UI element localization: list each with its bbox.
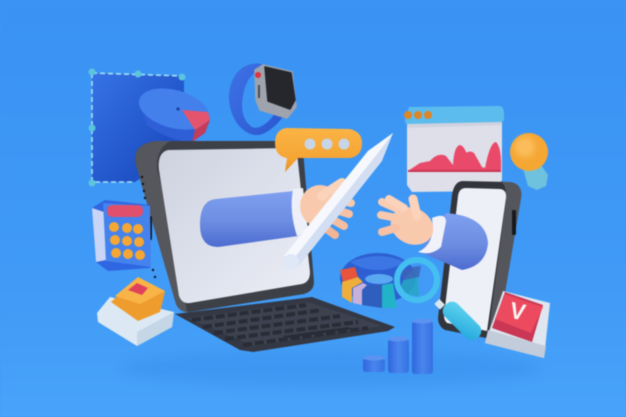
tablet screen: [159, 148, 310, 303]
callout: orange chat bubble: [275, 128, 362, 172]
arm: right sleeve: [418, 213, 488, 270]
check label: V: [507, 297, 529, 326]
button: red check key: [485, 291, 550, 358]
chart: 3D bars: [363, 318, 433, 374]
icon: smartwatch: [229, 63, 296, 135]
button: orange heart key: [97, 277, 174, 346]
device: phone: [438, 181, 521, 338]
hand: left: [300, 183, 351, 235]
device: keyboard: [175, 297, 395, 352]
icon: lightbulb: [510, 133, 548, 190]
icon: calculator: [92, 200, 151, 271]
phone screen: [444, 188, 506, 331]
chart: donut: [340, 253, 416, 308]
chart: 3D pie: [134, 81, 214, 143]
hand: right: [381, 199, 440, 252]
panel: dashed selection square: [88, 68, 186, 186]
ground shadow: [120, 350, 540, 386]
tablet body: [135, 141, 314, 312]
chart: 3D window with area chart: [404, 106, 504, 192]
icon: stylus pencil: [283, 133, 393, 270]
device: tablet: [135, 141, 314, 312]
icon: magnifying glass: [397, 260, 485, 344]
arm: left sleeve: [200, 188, 308, 247]
